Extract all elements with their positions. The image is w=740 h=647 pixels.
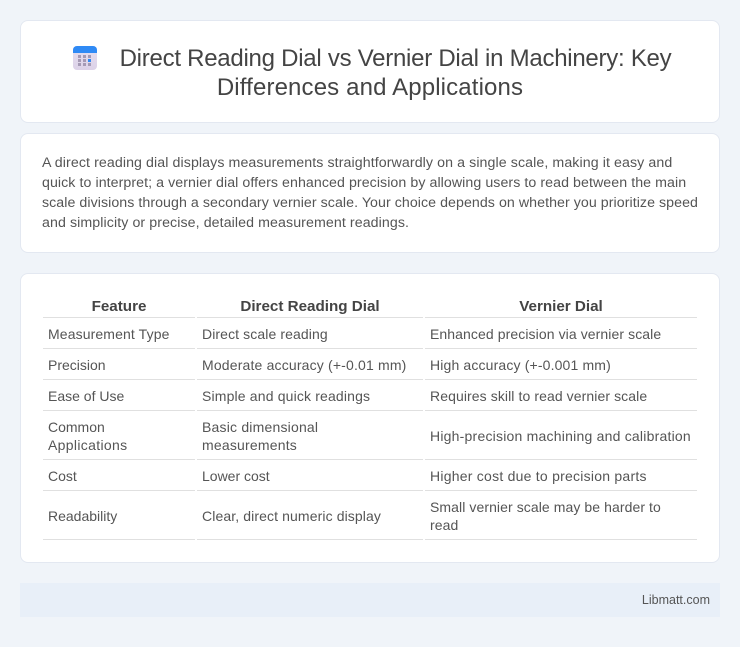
table header row xyxy=(92,298,603,315)
row: precision xyxy=(48,357,611,373)
row: measurement type: Measurement Type xyxy=(48,326,170,342)
table header row: Vernier Dial xyxy=(519,298,603,315)
table panel xyxy=(20,273,720,563)
row: ease of use: Requires skill to read vernier scale xyxy=(430,388,647,404)
intro text xyxy=(42,155,698,231)
row: common applications: High-precision machining and calibration xyxy=(430,428,691,444)
row: measurement type: Enhanced precision via vernier scale xyxy=(430,326,661,342)
row: readability: Readability xyxy=(48,508,117,524)
row: readability: Clear, direct numeric display xyxy=(202,508,381,524)
footer bar xyxy=(20,583,720,617)
row: common applications: Common xyxy=(48,419,105,435)
row: common applications: Applications xyxy=(48,437,127,453)
row: common applications: measurements xyxy=(202,437,297,453)
comparison table xyxy=(43,298,697,540)
footer source label: Libmatt.com xyxy=(642,593,710,607)
table header row: Feature xyxy=(92,298,146,315)
row: cost xyxy=(48,468,647,484)
row: ease of use: Ease of Use xyxy=(48,388,124,404)
intro text: quick to interpret; a vernier dial offers enhanced precision by allowing users to read between the main xyxy=(42,175,686,191)
row: cost: Higher cost due to precision parts xyxy=(430,468,647,484)
row: readability xyxy=(48,499,661,533)
intro panel xyxy=(20,133,720,253)
title: Differences and Applications xyxy=(217,74,523,101)
intro text: and simplicity or precise, detailed measurement readings. xyxy=(42,215,409,231)
title xyxy=(120,45,672,101)
row: ease of use: Simple and quick readings xyxy=(202,388,370,404)
table header row: Direct Reading Dial xyxy=(240,298,380,315)
row: ease of use xyxy=(48,388,647,404)
row: precision: Precision xyxy=(48,357,106,373)
row: measurement type: Direct scale reading xyxy=(202,326,328,342)
header panel xyxy=(20,20,720,123)
row: precision: High accuracy (+-0.001 mm) xyxy=(430,357,611,373)
row: readability: Small vernier scale may be harder to xyxy=(430,499,661,515)
title: Direct Reading Dial vs Vernier Dial in Machinery: Key xyxy=(120,45,671,72)
row: common applications xyxy=(48,419,691,453)
row: common applications: Basic dimensional xyxy=(202,419,318,435)
intro text: A direct reading dial displays measurements straightforwardly on a single scale, making it easy and xyxy=(42,155,672,171)
row: cost: Lower cost xyxy=(202,468,270,484)
row: cost: Cost xyxy=(48,468,77,484)
intro text: scale divisions through a secondary vernier scale. Your choice depends on whether you prioritize speed xyxy=(42,195,698,211)
row: measurement type xyxy=(48,326,661,342)
icon: calendar grid xyxy=(73,46,97,70)
row: precision: Moderate accuracy (+-0.01 mm) xyxy=(202,357,406,373)
row: readability: read xyxy=(430,517,458,533)
